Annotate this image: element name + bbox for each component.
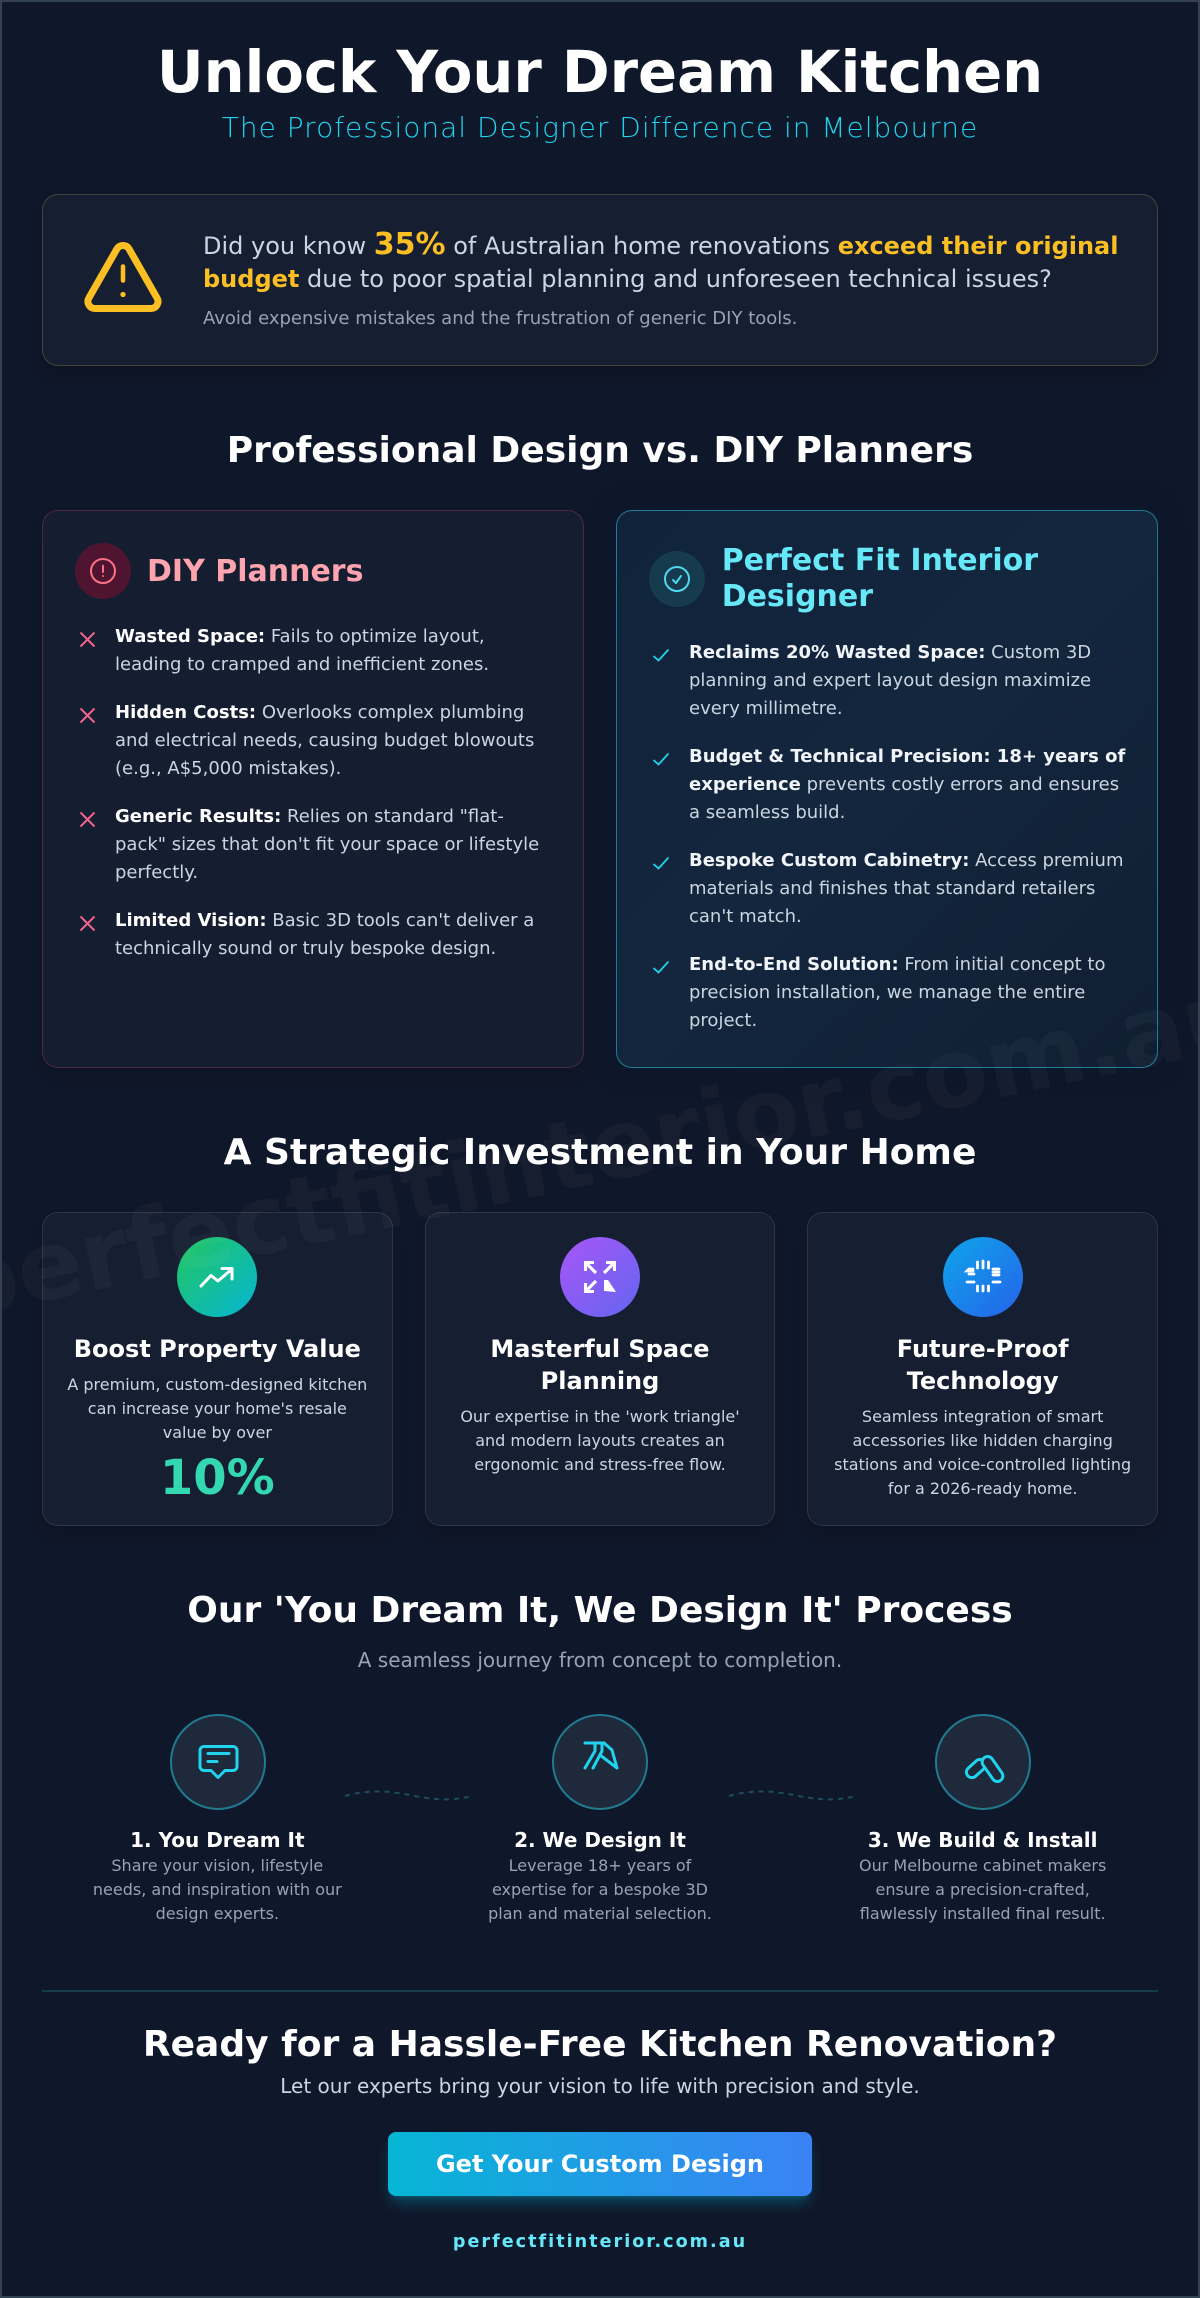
step text: Our Melbourne cabinet makers <box>859 1856 1106 1875</box>
card title: Future-Proof <box>897 1335 1069 1363</box>
step 1: you dream it <box>93 1714 342 1923</box>
process subtitle: A seamless journey from concept to completion. <box>358 1648 842 1672</box>
list item: end to end <box>689 954 1105 1031</box>
card text <box>67 1374 367 1442</box>
list item: hidden costs: (e.g., A$5,000 mistakes). <box>115 758 341 779</box>
card text <box>834 1406 1131 1498</box>
card title: Masterful Space <box>490 1335 710 1363</box>
card text: Our expertise in the 'work triangle' <box>460 1406 740 1426</box>
heading: Perfect Fit: Perfect Fit Interior <box>722 543 1038 578</box>
icon: cross 3 <box>80 812 96 828</box>
step title: 2. We Design It <box>514 1828 686 1852</box>
heading: comparison: Professional Design vs. DIY Planners <box>227 430 973 470</box>
card text: and modern layouts creates an <box>475 1430 725 1450</box>
card text: stations and voice-controlled lighting <box>834 1454 1131 1474</box>
panel: DIY planners <box>42 510 584 1068</box>
panel: budget warning alert <box>42 194 1158 366</box>
card text <box>460 1406 740 1474</box>
list item: bespoke cabinetry: Bespoke Custom Cabinetry: Access premium <box>689 850 1123 871</box>
icon: cross 4 <box>80 916 96 932</box>
website url: perfectfitinterior.com.au <box>453 2232 747 2252</box>
step text: Share your vision, lifestyle <box>111 1856 323 1875</box>
list item: end to end: precision installation, we manage the entire <box>689 982 1085 1003</box>
button: get your custom design: Get Your Custom Design <box>436 2150 764 2178</box>
step text <box>93 1856 342 1923</box>
list item: budget precision: experience prevents costly errors and ensures <box>689 774 1119 795</box>
icon: warning triangle <box>84 242 162 312</box>
list item: generic results: Generic Results: Relies on standard "flat- <box>115 806 504 827</box>
alert statement: Did you know 35% of Australian home renovations exceed their original <box>203 227 1118 262</box>
card title <box>897 1335 1069 1395</box>
step text: design experts. <box>156 1904 279 1923</box>
heading: DIY planners: DIY Planners <box>147 554 363 589</box>
icon: design tools <box>552 1714 648 1810</box>
step title: 1. You Dream It <box>130 1828 305 1852</box>
alert statement <box>203 227 1118 293</box>
list item: generic results <box>115 806 539 883</box>
list item: hidden costs: Hidden Costs: Overlooks complex plumbing <box>115 702 524 723</box>
step text: flawlessly installed final result. <box>860 1904 1106 1923</box>
icon: check 1 <box>653 648 670 662</box>
card text: A premium, custom-designed kitchen <box>67 1374 367 1394</box>
icon: cross 1 <box>80 632 96 648</box>
panel: masterful space planning <box>425 1212 775 1526</box>
heading: Perfect Fit <box>722 543 1038 614</box>
CTA subtitle: Let our experts bring your vision to life with precision and style. <box>280 2074 920 2098</box>
card title: Planning <box>541 1367 659 1395</box>
icon: chat bubble <box>170 1714 266 1810</box>
icon: check 2 <box>653 752 670 766</box>
panel: Perfect Fit Interior Designer <box>616 510 1158 1068</box>
list item: limited vision: Limited Vision: Basic 3D tools can't deliver a <box>115 910 534 931</box>
heading: investment: A Strategic Investment in Your Home <box>224 1132 976 1172</box>
alert statement: budget due to poor spatial planning and unforeseen technical issues? <box>203 265 1052 293</box>
list item: reclaims space: every millimetre. <box>689 698 843 719</box>
list item: wasted space <box>115 626 489 675</box>
list item: budget precision: a seamless build. <box>689 802 845 823</box>
list item: reclaims space <box>689 642 1091 719</box>
list item: limited vision: technically sound or truly bespoke design. <box>115 938 496 959</box>
panel: boost property value <box>42 1212 393 1526</box>
list item: wasted space: leading to cramped and inefficient zones. <box>115 654 489 675</box>
list item: budget precision: Budget & Technical Precision: 18+ years of <box>689 746 1125 767</box>
list item: budget precision <box>689 746 1126 823</box>
card title: Boost Property Value <box>74 1335 361 1363</box>
icon: trending up <box>177 1237 257 1317</box>
step text: Leverage 18+ years of <box>509 1856 691 1875</box>
card title <box>490 1335 710 1395</box>
card text: Seamless integration of smart <box>862 1406 1103 1426</box>
list item: limited vision <box>115 910 534 959</box>
card text: for a 2026-ready home. <box>888 1478 1077 1498</box>
step text: expertise for a bespoke 3D <box>492 1880 708 1899</box>
icon: chip <box>943 1237 1023 1317</box>
heading: process: Our 'You Dream It, We Design It' Process <box>187 1590 1013 1630</box>
icon: expand arrows <box>560 1237 640 1317</box>
icon: check 3 <box>653 856 670 870</box>
list item: bespoke cabinetry: materials and finishes that standard retailers <box>689 878 1095 899</box>
list item: wasted space: Wasted Space: Fails to optimize layout, <box>115 626 485 647</box>
step text <box>859 1856 1106 1923</box>
button: get your custom design <box>388 2132 812 2196</box>
alert note: Avoid expensive mistakes and the frustration of generic DIY tools. <box>203 308 797 329</box>
panel: future-proof technology <box>807 1212 1158 1526</box>
list item: generic results: perfectly. <box>115 862 198 883</box>
list item: bespoke cabinetry: can't match. <box>689 906 802 927</box>
icon: check 4 <box>653 960 670 974</box>
list item: end to end: project. <box>689 1010 757 1031</box>
step text <box>488 1856 712 1923</box>
step 2: we design it <box>488 1714 712 1923</box>
heading: Perfect Fit: Designer <box>722 579 873 614</box>
step text: ensure a precision-crafted, <box>875 1880 1090 1899</box>
list item: reclaims space: Reclaims 20% Wasted Space: Custom 3D <box>689 642 1091 663</box>
step text: needs, and inspiration with our <box>93 1880 342 1899</box>
subtitle: The Professional Designer Difference in Melbourne <box>222 111 978 144</box>
icon: tools <box>935 1714 1031 1810</box>
step 3: we build and install <box>859 1714 1106 1923</box>
list item: end to end: End-to-End Solution: From initial concept to <box>689 954 1105 975</box>
list item: reclaims space: planning and expert layout design maximize <box>689 670 1091 691</box>
list item: generic results: pack" sizes that don't fit your space or lifestyle <box>115 834 539 855</box>
stat: 10%: 10% <box>160 1450 275 1506</box>
icon: alert circle <box>75 543 131 599</box>
card text: accessories like hidden charging <box>852 1430 1113 1450</box>
title: Unlock Your Dream Kitchen <box>157 39 1043 106</box>
arrow: connector 1 <box>344 1790 469 1800</box>
card text: value by over <box>163 1422 272 1442</box>
list item: hidden costs <box>115 702 534 779</box>
icon: cross 2 <box>80 708 96 724</box>
list item: bespoke cabinetry <box>689 850 1123 927</box>
heading: call to action: Ready for a Hassle-Free Kitchen Renovation? <box>143 2024 1057 2065</box>
list item: hidden costs: and electrical needs, causing budget blowouts <box>115 730 534 751</box>
card text: can increase your home's resale <box>88 1398 347 1418</box>
card title: Technology <box>907 1367 1059 1395</box>
icon: check circle <box>649 551 705 607</box>
step title: 3. We Build & Install <box>868 1828 1097 1852</box>
arrow: connector 2 <box>728 1790 853 1800</box>
card text: ergonomic and stress-free flow. <box>474 1454 726 1474</box>
step text: plan and material selection. <box>488 1904 712 1923</box>
